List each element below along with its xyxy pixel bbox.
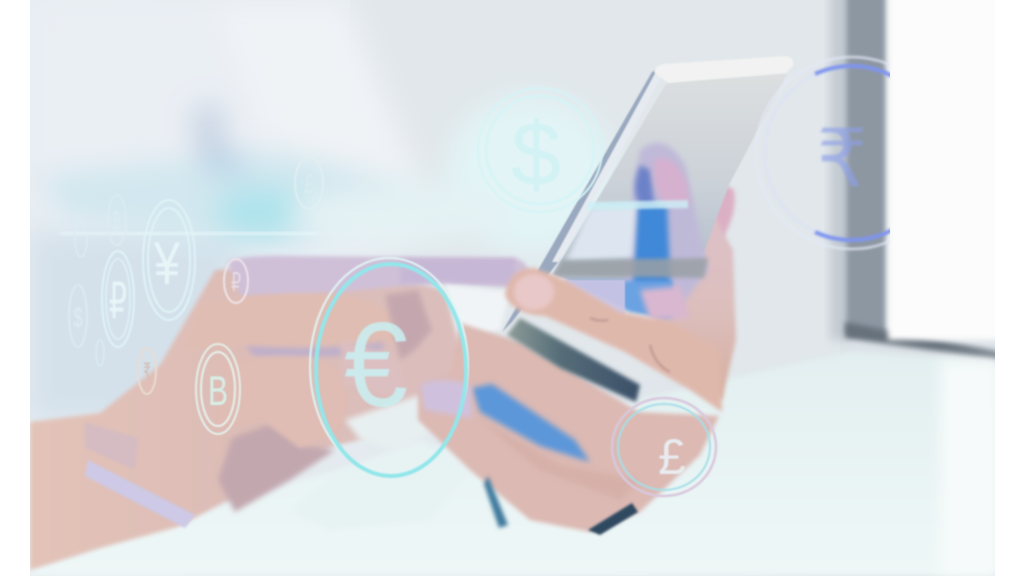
icon: small coin left xyxy=(69,285,87,347)
white surface seen between the hands xyxy=(446,284,506,331)
icon: yen coin xyxy=(143,200,195,320)
icon: tiny coin xyxy=(96,340,104,366)
table surface xyxy=(30,352,995,576)
thin light streak xyxy=(60,232,320,235)
middle finger xyxy=(262,294,390,339)
phone side edge xyxy=(502,68,660,332)
icon: small coin top xyxy=(108,195,126,245)
lower fingers and palm xyxy=(418,323,719,532)
icon: small coin on wrist: ₹ xyxy=(143,359,151,386)
icon: small coins group xyxy=(69,157,323,394)
icon: rupee coin xyxy=(758,54,890,252)
pale lavender fingertip xyxy=(420,380,472,418)
icon: small coin top: ₿ xyxy=(113,208,121,235)
icon: euro coin xyxy=(310,258,468,476)
fingers behind phone xyxy=(657,221,738,400)
pale highlight inside euro coin xyxy=(344,394,420,440)
lower finger shading xyxy=(510,440,633,496)
icon: small ruble coin on finger xyxy=(224,259,248,303)
phone back xyxy=(553,74,786,280)
icon: small coin on wrist xyxy=(138,348,156,394)
icon: small ruble coin on finger: ₽ xyxy=(231,267,241,297)
pointing index finger xyxy=(228,256,530,296)
icon: dollar coin xyxy=(478,88,602,212)
fingers behind the euro coin xyxy=(385,290,432,360)
window frame and bright window xyxy=(830,0,1008,360)
left hand xyxy=(30,256,530,570)
icon: pound coin xyxy=(612,398,716,496)
ring finger xyxy=(269,423,306,448)
icon: ruble coin: ₽ xyxy=(109,273,127,329)
phone screen reflection xyxy=(553,143,708,320)
icon: pound coin: £ xyxy=(658,429,686,485)
icon: bitcoin coin xyxy=(196,344,240,434)
icon: bitcoin coin: B xyxy=(208,367,228,414)
white shirt xyxy=(30,0,440,420)
icon: faint pound coin: £ xyxy=(304,169,314,199)
index finger over phone edge xyxy=(505,268,722,412)
smartphone xyxy=(502,56,793,332)
finger creases xyxy=(590,318,670,372)
icon: rupee coin: ₹ xyxy=(817,114,867,203)
icon: small coin far left xyxy=(75,221,87,257)
forearm and palm xyxy=(30,262,470,570)
right hand holding the phone xyxy=(418,268,722,535)
raised fingertip behind phone xyxy=(716,186,737,236)
dark phone bottom edge xyxy=(507,318,640,402)
icon: dollar coin: $ xyxy=(511,105,561,205)
icon: euro coin: € xyxy=(344,298,408,432)
icon: yen coin: ¥ xyxy=(153,230,180,297)
blue reflection on palm xyxy=(472,384,590,462)
index fingernail xyxy=(514,274,554,310)
dark sleeve details xyxy=(484,476,508,528)
translucent light bars xyxy=(85,422,195,528)
shaded web of the hand xyxy=(218,424,335,512)
cyan light streak xyxy=(40,95,615,255)
icon: faint pound coin xyxy=(295,157,323,209)
icon: ruble coin xyxy=(102,251,134,347)
phone top edge xyxy=(654,56,793,83)
icon: small coin left: $ xyxy=(74,302,83,333)
